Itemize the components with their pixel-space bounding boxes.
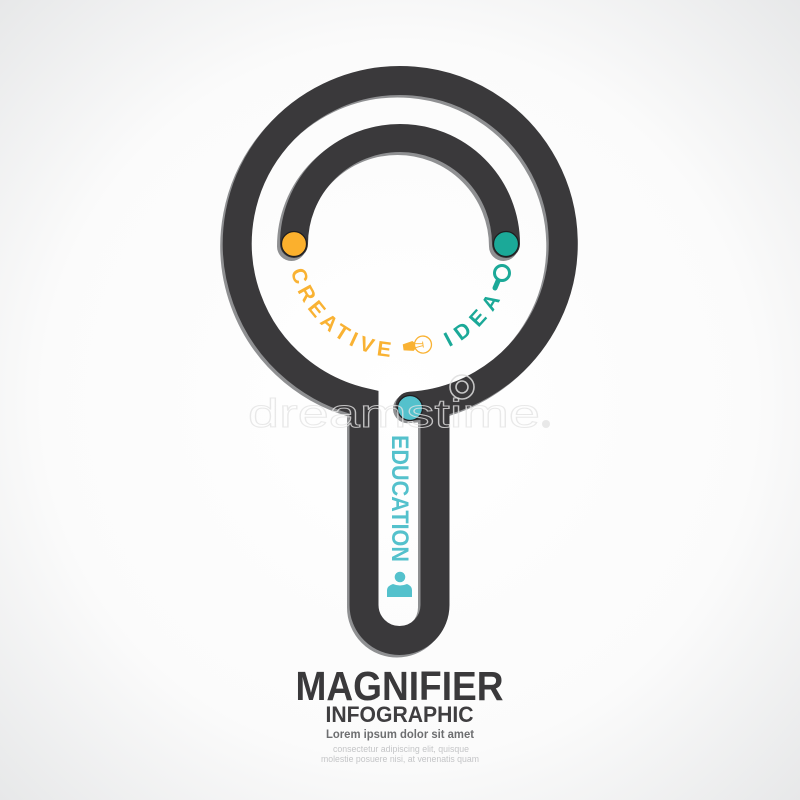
icon: light bulb (402, 335, 433, 356)
watermark: dreamstime (248, 392, 540, 436)
title: MAGNIFIER (296, 663, 504, 709)
body text (321, 744, 479, 764)
shadow of magnifier (235, 83, 561, 643)
icon: magnifier (494, 266, 510, 288)
dot: light blue (398, 396, 422, 420)
magnifier line graphic (235, 80, 563, 643)
subtitle: INFOGRAPHIC (326, 702, 474, 727)
tagline: Lorem ipsum dolor sit amet (326, 727, 474, 741)
inner arc (294, 138, 506, 244)
label: education: EDUCATION (386, 435, 413, 562)
body text: molestie posuere nisi, at venenatis quam (321, 754, 479, 764)
ring and handle (237, 80, 563, 641)
label: creative: CREATIVE (292, 268, 391, 357)
dot: teal (494, 232, 518, 256)
watermark spiral (450, 375, 550, 428)
body text: consectetur adipiscing elit, quisque (333, 744, 469, 754)
dot: orange (282, 232, 306, 256)
icon: person (387, 572, 412, 597)
label: idea: IDEA (444, 296, 500, 346)
